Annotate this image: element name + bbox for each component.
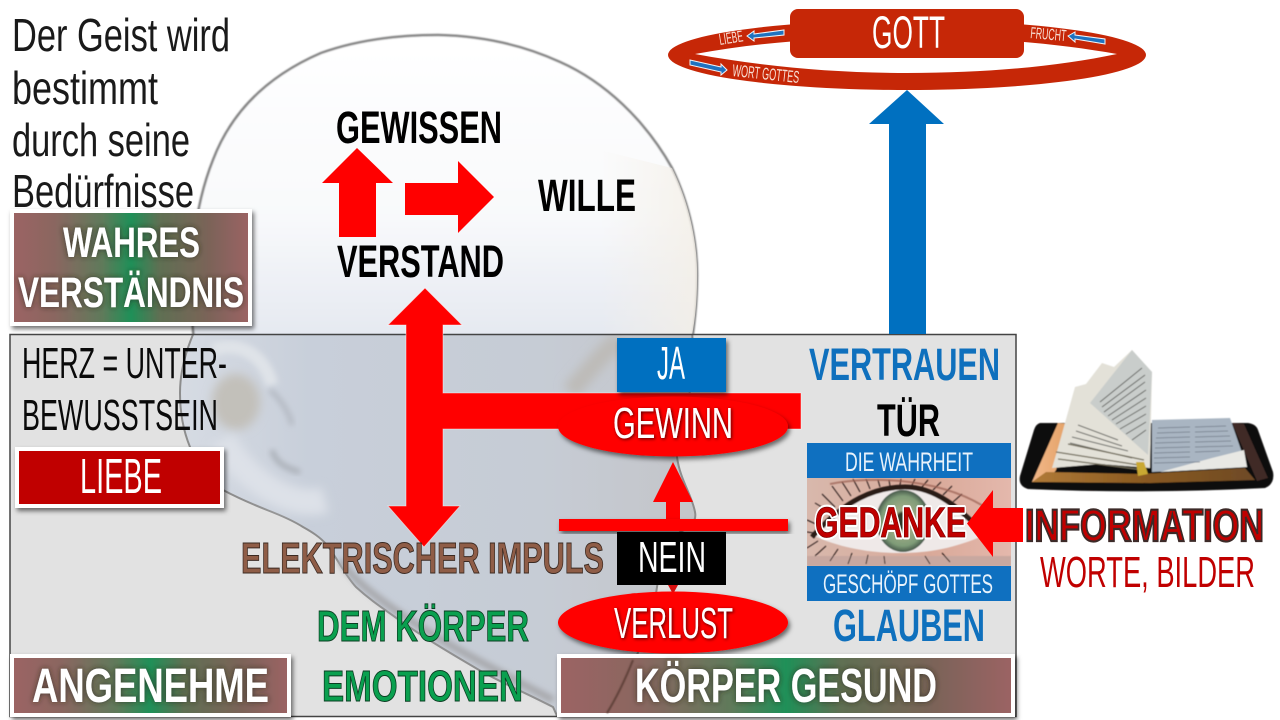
- panel border: [10, 334, 1016, 716]
- box: GOTT: [790, 7, 1024, 58]
- label: ELEKTRISCHER IMPULS: ELEKTRISCHER IMPULS: [241, 534, 604, 583]
- label: GLAUBEN: GLAUBEN: [833, 600, 985, 651]
- heading: the spirit is determined by its needs: bestimmt: [12, 62, 158, 114]
- banner: DIE WAHRHEIT: [807, 443, 1011, 478]
- banner: DIE WAHRHEIT: DIE WAHRHEIT: [845, 447, 973, 477]
- text: HERZ = UNTERBEWUSSTSEIN: BEWUSSTSEIN: [22, 391, 218, 440]
- callout: KÖRPER GESUND: KÖRPER GESUND: [635, 660, 937, 713]
- text: HERZ = UNTERBEWUSSTSEIN: [22, 339, 227, 440]
- heading: the spirit is determined by its needs: durch seine: [12, 114, 190, 166]
- ellipse: VERLUST: [558, 592, 788, 654]
- callout: LIEBE: [17, 449, 222, 506]
- banner: GESCHÖPF GOTTES: GESCHÖPF GOTTES: [823, 569, 993, 599]
- icon: open Bible: [1020, 350, 1273, 491]
- label: WORT GOTTES with arrow: [690, 60, 800, 87]
- label: WILLE: WILLE: [538, 170, 636, 221]
- divider bar: red barrier: [559, 519, 788, 531]
- diagram: God ring: [668, 7, 1146, 90]
- ellipse: GEWINN: [558, 396, 788, 456]
- image: eye: [807, 478, 1011, 566]
- box: JA: JA: [657, 337, 685, 389]
- label: GEDANKE: GEDANKE: [815, 499, 966, 547]
- arrow: up to Gewissen: [322, 148, 393, 237]
- arrow: blue trust arrow up to God: [869, 90, 944, 334]
- icon: human head silhouette: [180, 35, 697, 718]
- box: JA: [617, 337, 726, 392]
- label: GEWISSEN: GEWISSEN: [336, 102, 502, 153]
- arrow: information into thought: [967, 490, 1023, 557]
- label: LIEBE with arrow: LIEBE: [718, 28, 744, 49]
- ellipse: VERLUST: VERLUST: [614, 599, 733, 648]
- arrow: small up arrow from Nein to Gewinn: [653, 462, 693, 522]
- callout: ANGENEHME: ANGENEHME: [32, 660, 269, 713]
- label: EMOTIONEN: EMOTIONEN: [322, 662, 523, 711]
- arrow: red T connector with arrows to Verstand and Impuls: [388, 288, 801, 547]
- label: TÜR: TÜR: [877, 395, 940, 446]
- callout: WAHRES VERSTÄNDNIS: VERSTÄNDNIS: [18, 269, 244, 317]
- label: WORT GOTTES with arrow: WORT GOTTES: [732, 61, 800, 87]
- ellipse: GEWINN: GEWINN: [613, 399, 733, 448]
- ear and face shading: [212, 374, 260, 430]
- callout: WAHRES VERSTÄNDNIS: [12, 211, 250, 324]
- label: DEM KÖRPER: DEM KÖRPER: [317, 602, 529, 651]
- banner: GESCHÖPF GOTTES: [807, 566, 1011, 601]
- arrow: right to Wille: [405, 161, 494, 233]
- label: GEDANKE: GEDANKE: [815, 499, 966, 547]
- text: HERZ = UNTERBEWUSSTSEIN: HERZ = UNTER-: [22, 339, 227, 388]
- label: VERTRAUEN: VERTRAUEN: [809, 339, 1000, 390]
- box: NEIN: [617, 532, 726, 585]
- callout: WAHRES VERSTÄNDNIS: WAHRES: [63, 219, 200, 267]
- panel: heart / subconscious background box: [10, 334, 1016, 716]
- callout: LIEBE: LIEBE: [80, 450, 162, 504]
- heading: the spirit is determined by its needs: Bedürfnisse: [12, 165, 194, 217]
- heading: the spirit is determined by its needs: Der Geist wird: [12, 9, 230, 61]
- heading: the spirit is determined by its needs: [12, 9, 230, 217]
- label: VERSTAND: VERSTAND: [337, 236, 504, 287]
- box: GOTT: GOTT: [872, 7, 945, 58]
- callout: KÖRPER GESUND: [559, 656, 1013, 715]
- panel: eye with thought: [807, 443, 1011, 601]
- label: FRUCHT with arrow: FRUCHT: [1030, 25, 1067, 45]
- arrow tip: between Verlust and Nein: [668, 585, 678, 594]
- label: LIEBE with arrow: [718, 28, 784, 49]
- box: NEIN: NEIN: [638, 533, 706, 582]
